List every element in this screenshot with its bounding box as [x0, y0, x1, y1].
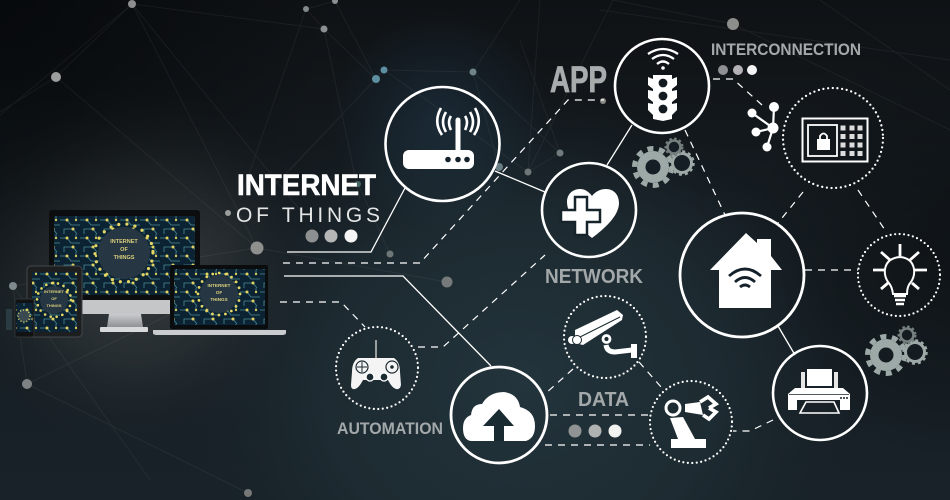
interconnection dots [718, 65, 757, 75]
label: INTERCONNECTION: INTERCONNECTION [711, 41, 861, 59]
icon: gears lower [868, 326, 926, 374]
laptop [153, 265, 286, 335]
node: game controller [336, 327, 418, 409]
title dots [306, 230, 358, 242]
label: DATA: DATA [578, 388, 629, 411]
monitor: INTERNET [110, 239, 138, 245]
title [236, 169, 380, 227]
laptop: OF [216, 290, 222, 295]
phones [6, 299, 34, 337]
node: robot arm [650, 381, 732, 463]
node: access-control lock panel [783, 88, 883, 188]
node: health heart [542, 163, 636, 257]
node: smart home [680, 213, 804, 337]
node: printer [773, 346, 867, 440]
tablet: INTERNET [44, 289, 65, 294]
monitor: THINGS [114, 255, 135, 261]
monitor [49, 210, 200, 332]
tablet: OF [51, 296, 57, 301]
laptop: INTERNET [208, 283, 231, 288]
devices group [6, 210, 286, 337]
node: router [386, 87, 500, 201]
label: APP: APP [550, 59, 607, 100]
icon: hub network [748, 102, 779, 152]
icon: gears upper [634, 138, 694, 186]
monitor: OF [120, 247, 128, 253]
node: security camera [564, 296, 646, 378]
label: NETWORK: NETWORK [545, 266, 644, 288]
title: INTERNET [237, 169, 376, 202]
connector lines [280, 79, 887, 445]
label: AUTOMATION: AUTOMATION [337, 420, 443, 438]
title: OF THINGS [236, 204, 380, 227]
tablet: THINGS [46, 303, 62, 308]
node: light bulb [858, 234, 940, 316]
tablet [27, 266, 82, 337]
node: traffic light [615, 39, 709, 133]
laptop: THINGS [210, 297, 228, 302]
data dots [568, 424, 622, 438]
node: cloud upload [451, 367, 547, 463]
